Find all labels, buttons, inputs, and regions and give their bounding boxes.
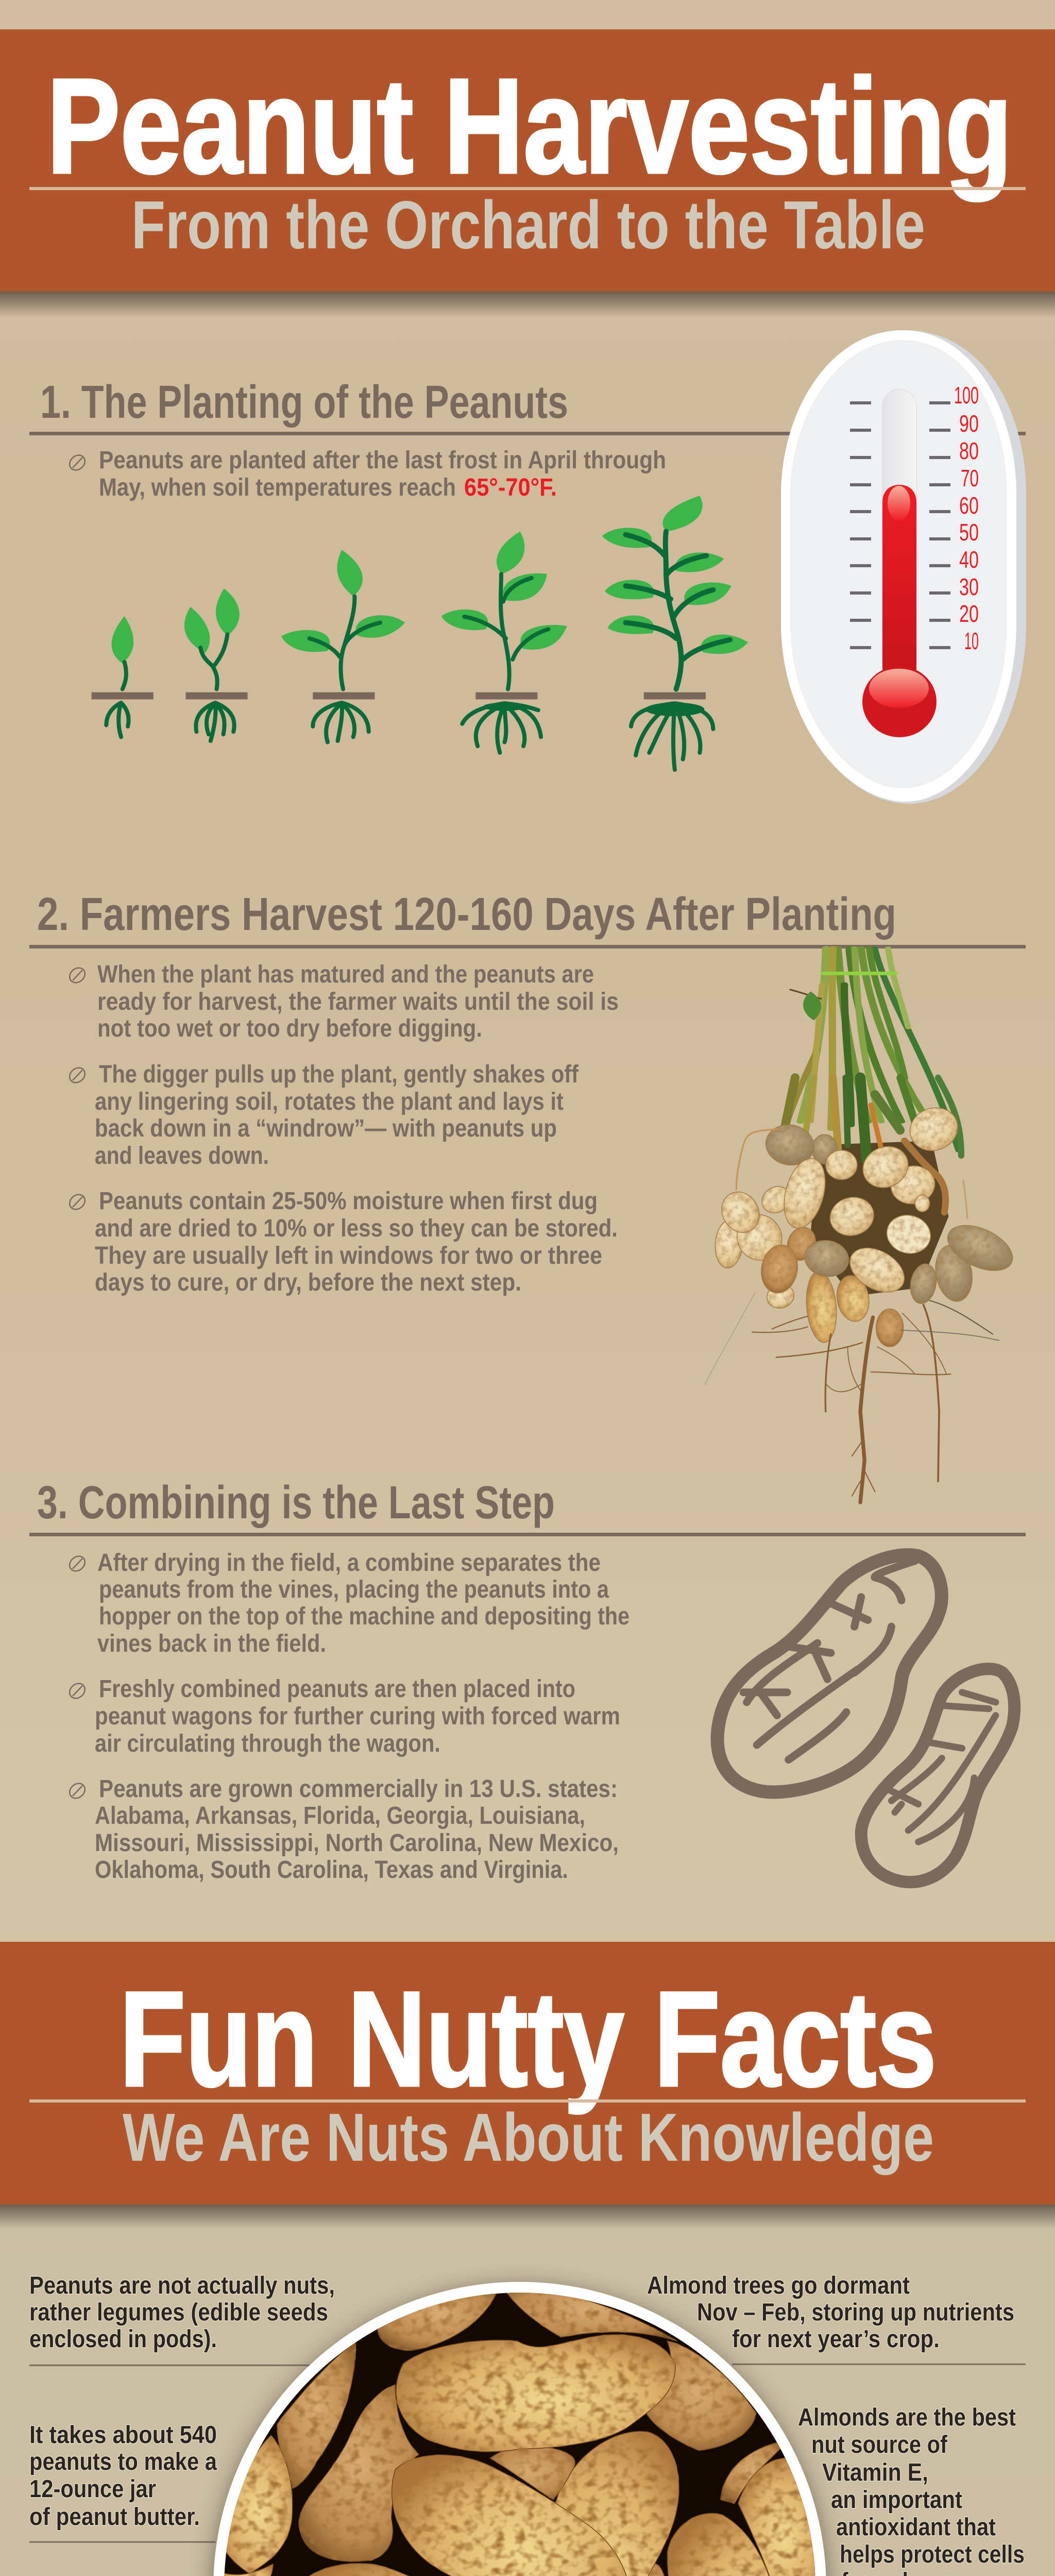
fact: legumes: rather legumes (edible seeds [29,2299,328,2326]
scale numbers: 20 [959,600,979,627]
header banner [0,29,1055,317]
bullet: wagons: Freshly combined peanuts are then placed into [99,1675,575,1703]
fact: peanut butter [29,2421,217,2531]
scale numbers: 40 [959,546,979,573]
fact connector lines [29,2364,1026,2576]
thermometer [781,330,1026,804]
plant stage 5 [602,496,748,770]
peanut photo circle [213,2282,826,2576]
scale numbers [954,382,979,654]
bullet: states: Missouri, Mississippi, North Carolina, New Mexico, [95,1829,619,1857]
scale numbers: 100 [954,382,979,409]
section 1 heading: 1. The Planting of the Peanuts [40,377,568,428]
fact: vitamin E: Almonds are the best [798,2404,1016,2431]
bullet: moisture: They are usually left in windows for two or three [95,1242,602,1269]
fact: peanut butter: peanuts to make a [29,2448,217,2476]
bullet: plant matured [66,961,619,1042]
fact: vitamin E: Vitamin E, [822,2459,928,2486]
plant growth stages [92,496,748,770]
photo peanuts [218,2284,821,2576]
bullet: states: Oklahoma, South Carolina, Texas and Virginia. [95,1856,568,1884]
bullet: digger: any lingering soil, rotates the plant and lays it [95,1088,564,1115]
scale numbers: 30 [959,573,979,600]
plant stage 3 [281,550,405,742]
bullet: moisture [66,1188,618,1296]
fact: almond dormant: for next year’s crop. [732,2326,940,2353]
planting text [99,447,666,501]
scale numbers: 60 [959,492,979,519]
bullet: digger [66,1061,579,1170]
bullet: digger: The digger pulls up the plant, gently shakes off [99,1061,579,1088]
fact: peanut butter: of peanut butter. [29,2503,200,2531]
bullet: plant matured: When the plant has matured and the peanuts are [97,961,594,988]
mercury column and bulb [862,485,937,737]
plant stage 2 [184,588,248,741]
bullet icon [66,452,88,473]
section 1: planting [29,330,1026,804]
section 2: harvest [29,889,1026,1502]
bullet: digger: and leaves down. [95,1142,269,1170]
bullet: wagons: peanut wagons for further curing with forced warm [95,1703,620,1730]
fact: vitamin E [798,2404,1025,2576]
bullet: wagons: air circulating through the wagon. [95,1730,440,1757]
pods [713,1101,1019,1347]
icon: peanut pair [718,1555,1014,1882]
plant stage 1 [92,616,154,737]
planting text: 65°-70°F. [464,474,557,501]
dark core behind pods [785,1078,961,1296]
scale numbers: 80 [959,437,979,464]
bullet: moisture: and are dried to 10% or less so they can be stored. [95,1215,618,1242]
plant stage 4 [441,532,567,753]
stems [787,948,959,1150]
fun facts banner [0,1942,1055,2229]
bullet: combine: After drying in the field, a combine separates the [97,1549,601,1577]
bullet: moisture: Peanuts contain 25-50% moisture when first dug [99,1188,598,1215]
fact: vitamin E: antioxidant that [836,2514,996,2541]
thermometer body [781,330,1026,804]
fact: vitamin E: helps protect cells [840,2541,1025,2568]
bullet: states: Alabama, Arkansas, Florida, Georgia, Louisiana, [95,1802,585,1829]
fact: legumes: enclosed in pods). [29,2326,217,2353]
facts: left column [29,2272,335,2576]
fact: peanut butter: 12-ounce jar [29,2476,156,2503]
bullet: moisture: days to cure, or dry, before the next step. [95,1269,521,1296]
bullet: combine: vines back in the field. [97,1630,326,1657]
bullet: plant matured: ready for harvest, the farmer waits until the soil is [97,988,619,1015]
planting text: Peanuts are planted after the last frost in April through [99,447,666,474]
section 2 heading: 2. Farmers Harvest 120-160 Days After Planting [37,889,896,940]
facts: right column [528,2272,1025,2576]
fact: almond dormant: Nov – Feb, storing up nutrients [697,2299,1014,2326]
bullet: digger: back down in a “windrow”— with peanuts up [95,1115,557,1142]
fact: vitamin E: an important [831,2486,962,2514]
scale numbers: 90 [959,410,979,437]
bullet: combine: hopper on the top of the machine and depositing the [99,1603,629,1630]
fact: almond dormant [647,2272,1014,2353]
peanut plant photo [705,948,1019,1502]
planting text: May, when soil temperatures reach [99,474,456,501]
scale ticks [850,401,950,649]
section 3 heading: 3. Combining is the Last Step [37,1477,555,1529]
bullet: wagons [66,1675,620,1757]
tube [882,389,916,678]
fact: legumes: Peanuts are not actually nuts, [29,2272,335,2299]
fact: almond dormant: Almond trees go dormant [647,2272,910,2299]
scale numbers: 70 [961,465,979,492]
bullet: combine [66,1549,629,1657]
bullet: states [66,1775,619,1884]
bullet: combine: peanuts from the vines, placing the peanuts into a [99,1576,609,1603]
bullet: states: Peanuts are grown commercially in 13 U.S. states: [99,1775,618,1803]
section 3: combining [29,1477,1026,1884]
fact: peanut butter: It takes about 540 [29,2421,217,2449]
fact: legumes [29,2272,335,2353]
scale numbers: 10 [964,628,979,654]
bullet: plant matured: not too wet or too dry before digging. [97,1015,482,1042]
roots [705,1129,999,1502]
fact: vitamin E: nut source of [811,2431,948,2459]
scale numbers: 50 [959,519,979,546]
